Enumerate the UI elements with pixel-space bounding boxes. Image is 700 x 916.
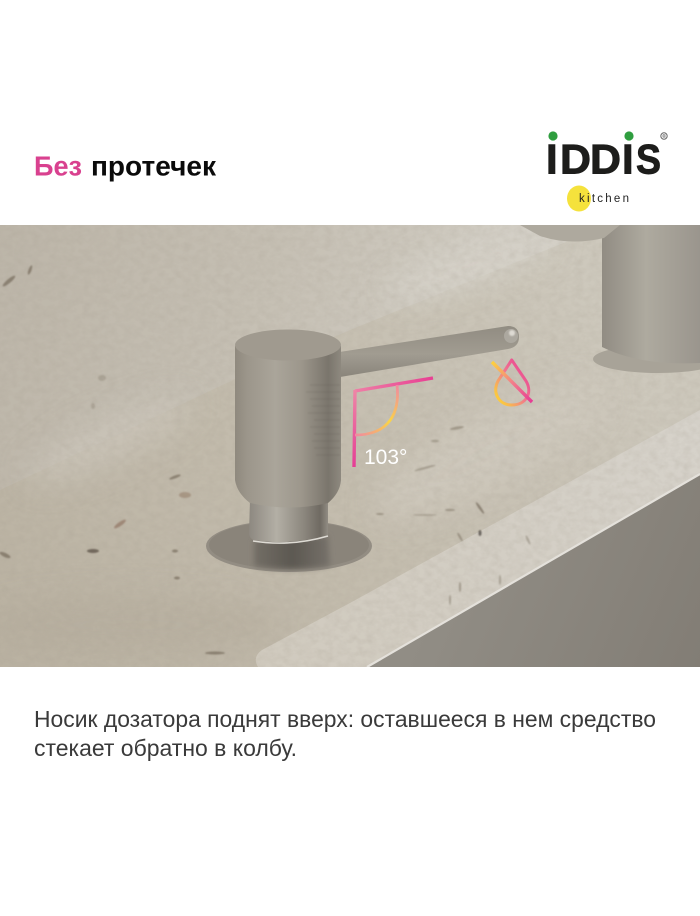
description text: стекает обратно в колбу. [34, 735, 297, 761]
stone wall [0, 225, 568, 490]
stone grain [316, 230, 690, 666]
logo: IDDIS kitchen [546, 131, 667, 212]
logo: IDDIS kitchen: I [546, 136, 558, 182]
icon: crossed-out drop [492, 360, 532, 405]
logo: IDDIS kitchen: S [636, 136, 661, 182]
angle value: 103° [364, 446, 407, 469]
photo: dispenser on stone countertop [0, 214, 700, 667]
logo: IDDIS kitchen: ® [662, 133, 666, 140]
dispenser flange [206, 520, 372, 572]
angle marker [354, 378, 433, 467]
right faucet [520, 225, 700, 373]
countertop surface [0, 225, 700, 667]
brushed metal shade [306, 385, 340, 455]
description text [34, 706, 656, 761]
neck highlight [253, 536, 328, 543]
soft lighting patches [46, 263, 516, 505]
title: протечек [91, 150, 217, 182]
description text: Носик дозатора поднят вверх: оставшееся в нем средство [34, 706, 656, 732]
sink rim highlight [367, 474, 700, 667]
dispenser body [235, 346, 341, 508]
countertop front edge [256, 410, 700, 667]
logo: IDDIS kitchen: D [560, 136, 591, 182]
sink [367, 475, 700, 667]
logo: IDDIS kitchen: D [590, 136, 621, 182]
title: Без [34, 150, 82, 182]
title [34, 150, 217, 182]
dispenser neck [249, 500, 328, 542]
dispenser top cap [235, 330, 341, 360]
stone pits [0, 265, 531, 654]
logo: IDDIS kitchen: kitchen [579, 193, 629, 205]
dispenser spout [333, 326, 519, 377]
logo: IDDIS kitchen: I [622, 136, 634, 182]
